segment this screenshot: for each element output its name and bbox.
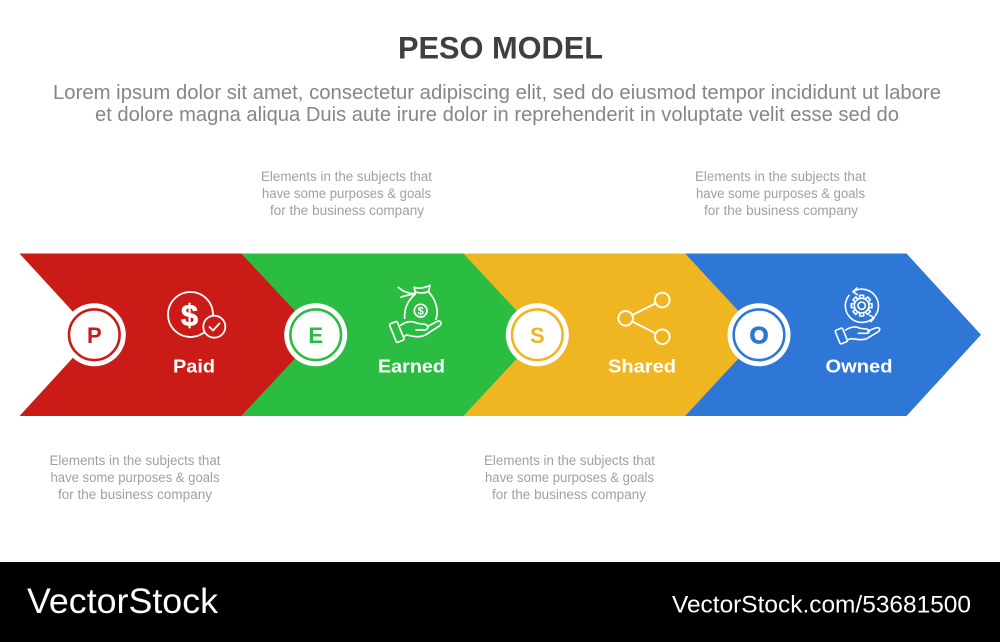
description: earned xyxy=(261,169,432,218)
description: owned xyxy=(695,169,866,218)
arrow: earned segment xyxy=(242,254,539,416)
description: earned: for the business company xyxy=(270,203,424,218)
arrow: owned segment xyxy=(685,254,981,416)
subtitle text block xyxy=(53,82,941,126)
arrow: paid segment xyxy=(20,254,317,416)
badge: O xyxy=(728,303,790,366)
description: paid: Elements in the subjects that xyxy=(50,453,221,468)
footer bar: VectorStock.com/53681500 xyxy=(672,592,971,618)
badge: P: P xyxy=(87,323,102,348)
description: earned: have some purposes & goals xyxy=(262,186,431,201)
icon: gear on hand xyxy=(835,288,880,344)
icon: paid dollar with check xyxy=(168,292,225,338)
subtitle text block: Lorem ipsum dolor sit amet, consectetur adipiscing elit, sed do eiusmod tempor incididunt ut labore xyxy=(53,82,941,104)
icon: money bag on hand: $ xyxy=(418,306,424,318)
footer bar xyxy=(0,562,1000,642)
badge: P xyxy=(63,303,126,366)
description: shared xyxy=(484,453,655,502)
label: Earned: Earned xyxy=(378,356,445,376)
badge: E xyxy=(284,303,347,366)
description: paid: have some purposes & goals xyxy=(50,470,220,485)
description: shared: for the business company xyxy=(492,487,646,502)
description: paid xyxy=(50,453,221,502)
label: Owned: Owned xyxy=(826,356,892,376)
arrow: shared segment xyxy=(464,254,760,416)
description: owned: for the business company xyxy=(704,203,858,218)
description: paid: for the business company xyxy=(58,487,212,502)
description: owned: have some purposes & goals xyxy=(696,186,865,201)
badge: O: O xyxy=(749,323,769,350)
label: Paid: Paid xyxy=(173,356,215,376)
badge: S xyxy=(506,303,569,366)
footer bar: VectorStock xyxy=(27,582,219,621)
subtitle text block: et dolore magna aliqua Duis aute irure dolor in reprehenderit in voluptate velit esse sed do xyxy=(95,104,899,126)
icon: paid dollar with check: $ xyxy=(181,298,198,332)
description: owned: Elements in the subjects that xyxy=(695,169,866,184)
description: shared: have some purposes & goals xyxy=(485,470,654,485)
badge: S: S xyxy=(530,323,545,348)
title: PESO MODEL xyxy=(398,30,603,66)
description: earned: Elements in the subjects that xyxy=(261,169,432,184)
icon: money bag on hand xyxy=(389,285,441,343)
description: shared: Elements in the subjects that xyxy=(484,453,655,468)
icon: share nodes xyxy=(618,293,670,344)
label: Shared: Shared xyxy=(608,356,676,376)
badge: E: E xyxy=(308,323,323,348)
